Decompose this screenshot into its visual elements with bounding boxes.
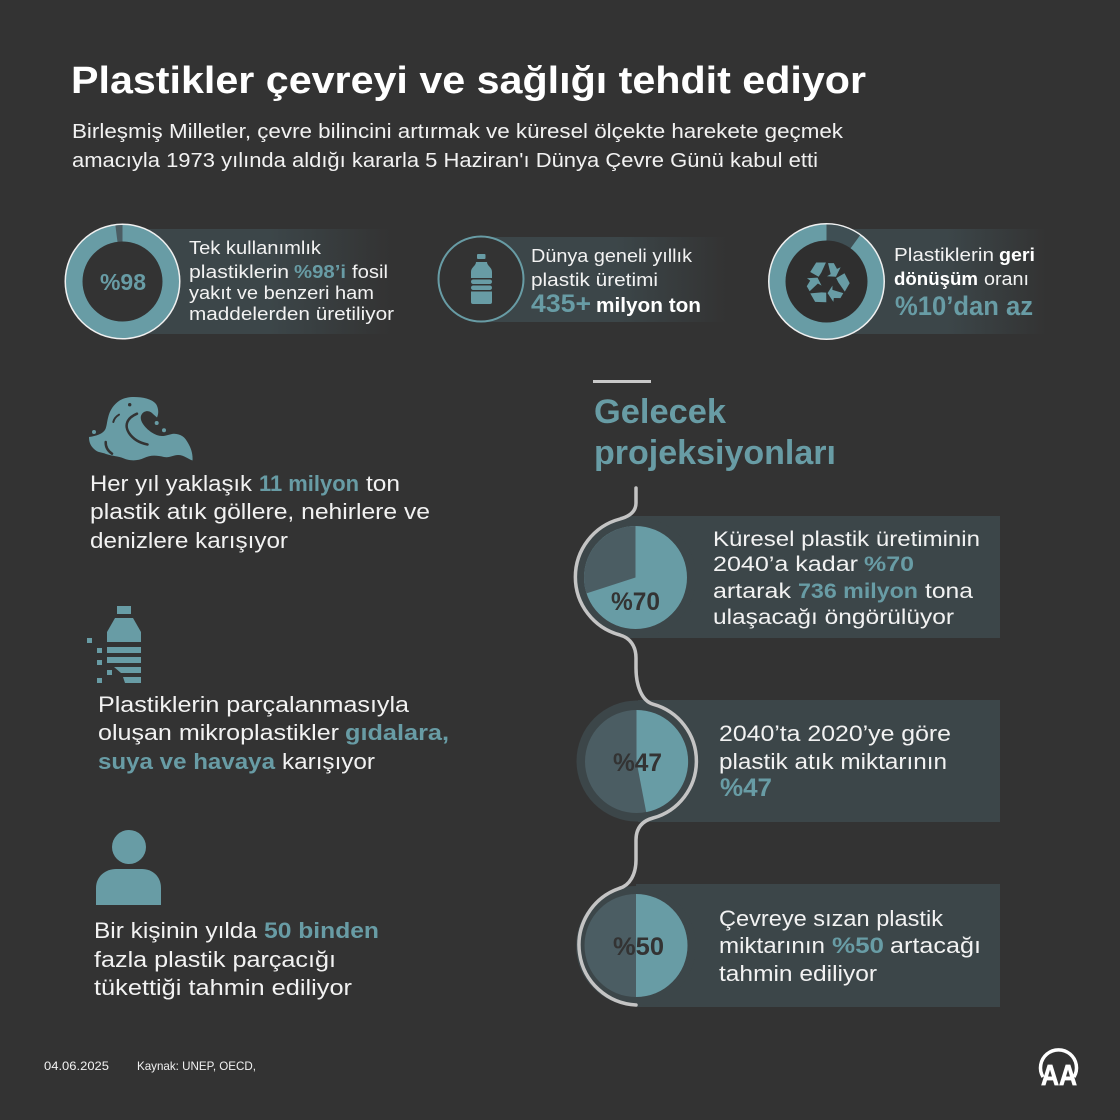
panel: annual production (438, 236, 726, 322)
subtitle: amacıyla 1973 yılında aldığı kararla 5 Haziran'ı Dünya Çevre Günü kabul etti (72, 149, 818, 172)
text: personal consumption: 50 binden (264, 918, 379, 943)
block: personal consumption (94, 830, 379, 1000)
heading: future projections: projeksiyonları (594, 434, 836, 472)
text: ocean pollution: plastik atık göllere, nehirlere ve (90, 499, 430, 524)
text: fossil fuel share: Tek kullanımlık (189, 237, 322, 258)
text: ocean pollution: 11 milyon (259, 471, 359, 496)
text: production projection: 736 milyon (798, 579, 918, 603)
text: production projection: %70 (864, 552, 914, 576)
donut chart: 98 percent (64, 224, 180, 340)
panel: leakage projection (576, 884, 1000, 1007)
title: Plastikler çevreyi ve sağlığı tehdit ediyor (71, 60, 866, 102)
icon: recycling arrows (803, 263, 853, 307)
text: leakage projection: Çevreye sızan plastik (719, 906, 944, 931)
icon: wave (89, 397, 193, 460)
text: recycling rate: Plastiklerin (894, 245, 994, 265)
text: recycling rate: oranı (984, 269, 1029, 289)
logo: AA (1040, 1050, 1077, 1092)
donut chart: 98 percent: %98 (100, 269, 146, 295)
text: fossil fuel share: yakıt ve benzeri ham (189, 282, 374, 303)
block: ocean pollution (89, 397, 430, 553)
text: annual production: plastik üretimi (531, 269, 658, 290)
subtitle (72, 120, 844, 172)
text: ocean pollution: Her yıl yaklaşık (90, 471, 253, 496)
pie chart: 50 percent: %50 (613, 933, 664, 961)
text: production projection: artarak (713, 579, 791, 603)
panel: recycling rate (768, 223, 1046, 340)
pie chart: 70 percent (584, 526, 687, 629)
text: recycling rate (894, 245, 1035, 321)
text: production projection: ulaşacağı öngörülüyor (713, 605, 954, 629)
footer source: Kaynak: UNEP, OECD, (137, 1059, 256, 1073)
heading: future projections: Gelecek (594, 393, 726, 431)
timeline connector line (575, 488, 696, 1005)
text: ocean pollution (90, 471, 430, 553)
donut chart: 10 percent (768, 223, 885, 340)
text: leakage projection: artacağı (890, 933, 981, 958)
text: personal consumption: tükettiği tahmin ediliyor (94, 975, 353, 1000)
text: annual production (531, 245, 701, 318)
pie chart: 47 percent (585, 710, 688, 813)
icon: fragmenting bottle (87, 606, 141, 683)
text: microplastics: gıdalara, (345, 720, 449, 745)
text: microplastics: oluşan mikroplastikler (98, 720, 340, 745)
pie chart: 70 percent: %70 (611, 588, 660, 616)
text: ocean pollution: denizlere karışıyor (90, 528, 289, 553)
panel: fossil fuel share (64, 224, 394, 340)
text: annual production: Dünya geneli yıllık (531, 245, 693, 266)
pie chart: 47 percent: %47 (613, 749, 662, 777)
text: fossil fuel share: %98’i (294, 261, 346, 282)
text: leakage projection: %50 (832, 933, 884, 958)
text: annual production: milyon ton (596, 295, 701, 317)
text: recycling rate: dönüşüm (894, 269, 978, 289)
footer date: 04.06.2025 (44, 1059, 109, 1073)
logo: AA: AA (1041, 1060, 1077, 1092)
text: production projection: tona (925, 579, 973, 603)
icon: bottle in circle (438, 236, 524, 322)
text: microplastics: Plastiklerin parçalanmasıyla (98, 692, 410, 717)
block: microplastics (87, 606, 449, 774)
text: microplastics: karışıyor (282, 749, 376, 774)
text: recycling rate: geri (999, 245, 1035, 265)
text: leakage projection (719, 906, 981, 986)
text: production projection: Küresel plastik üretiminin (713, 527, 980, 551)
subtitle: Birleşmiş Milletler, çevre bilincini artırmak ve küresel ölçekte harekete geçmek (72, 120, 844, 143)
text: waste projection (719, 721, 951, 802)
text: recycling rate: %10’dan az (895, 291, 1033, 321)
text: leakage projection: tahmin ediliyor (719, 961, 877, 986)
heading: future projections (593, 380, 836, 472)
text: microplastics: suya ve havaya (98, 749, 276, 774)
text: annual production: 435+ (531, 290, 591, 318)
text: microplastics (98, 692, 449, 774)
text: production projection: 2040’a kadar (713, 552, 858, 576)
panel: waste projection (576, 700, 1000, 822)
text: fossil fuel share: plastiklerin (189, 261, 289, 282)
text: ocean pollution: ton (366, 471, 400, 496)
panel: production projection (576, 516, 1000, 638)
text: fossil fuel share: fosil (352, 261, 388, 282)
icon: person (96, 830, 161, 905)
text: waste projection: 2040’ta 2020’ye göre (719, 721, 951, 746)
text: fossil fuel share: maddelerden üretiliyor (189, 303, 394, 324)
text: personal consumption (94, 918, 379, 1000)
text: waste projection: plastik atık miktarının (719, 749, 947, 774)
pie chart: 50 percent (584, 894, 688, 997)
text: personal consumption: fazla plastik parçacığı (94, 947, 336, 972)
text: leakage projection: miktarının (719, 933, 825, 958)
text: production projection (713, 527, 980, 629)
text: fossil fuel share (189, 237, 394, 324)
text: waste projection: %47 (720, 774, 772, 802)
text: personal consumption: Bir kişinin yılda (94, 918, 258, 943)
